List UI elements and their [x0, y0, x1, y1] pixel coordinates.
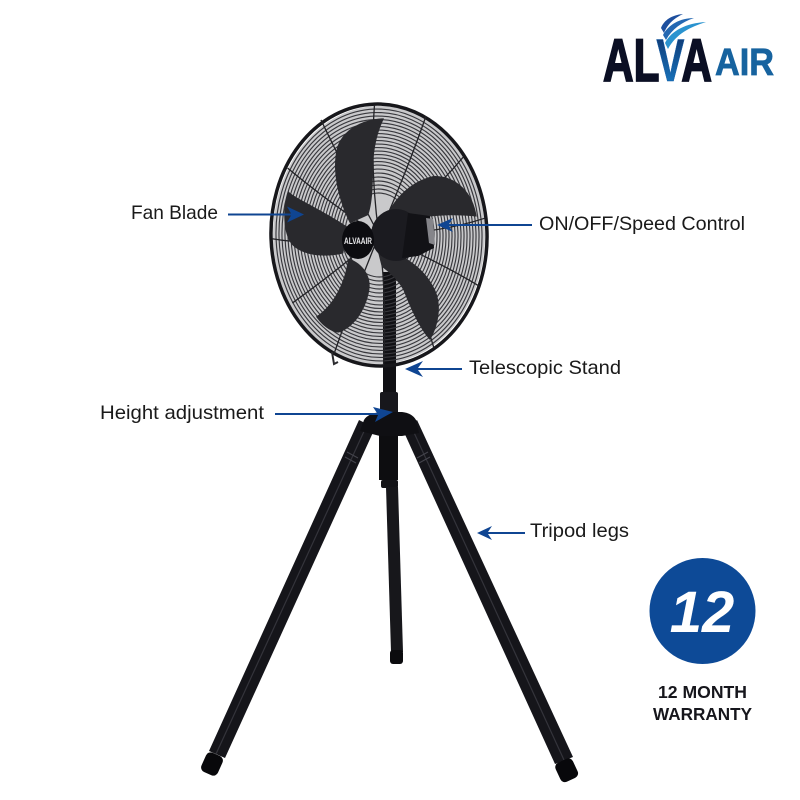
label: ON/OFF/Speed Control: ON/OFF/Speed Control [539, 213, 745, 235]
right leg [403, 420, 580, 784]
fan head [266, 100, 492, 370]
arrow: Height adjustment [275, 407, 393, 422]
blade right [383, 176, 477, 227]
motor housing [371, 209, 435, 261]
arrow: Telescopic Stand [405, 361, 462, 377]
telescopic pole [383, 272, 396, 396]
warranty badge: WARRANTY [653, 704, 752, 724]
cage clip [332, 352, 338, 364]
label: Fan Blade: Fan Blade [131, 202, 218, 224]
fan cage [266, 100, 492, 370]
logo wordmark AIR: AIR [715, 42, 774, 84]
arrow: Tripod legs [477, 526, 525, 540]
logo swoosh [661, 14, 706, 49]
cage backing tone [273, 106, 485, 364]
left leg [200, 420, 375, 777]
warranty number: 12 [670, 580, 734, 645]
warranty circle [650, 558, 756, 664]
label: Tripod legs: Tripod legs [530, 520, 629, 542]
label: Height adjustment: Height adjustment [100, 402, 265, 424]
hub logo text: ALVAAIR [344, 236, 372, 246]
arrow: Fan Blade [228, 206, 304, 222]
label: Tripod legs [477, 520, 629, 542]
blade bottom left [316, 258, 370, 333]
fan blades [284, 118, 477, 340]
tripod stand [200, 272, 580, 784]
logo: Alva Air [603, 14, 774, 94]
hub badge [342, 221, 374, 259]
rear centre leg [379, 434, 403, 664]
label: Telescopic Stand: Telescopic Stand [469, 357, 621, 379]
logo wordmark ALVA: ALVA [603, 27, 712, 94]
blade left [284, 191, 347, 256]
warranty badge [650, 558, 756, 724]
label: Height adjustment [100, 402, 393, 424]
blade bottom right [377, 247, 439, 340]
blade top [335, 118, 384, 223]
label: ON/OFF/Speed Control [437, 213, 745, 235]
tripod hub [360, 412, 419, 436]
height adjustment collar [380, 392, 398, 414]
label: Telescopic Stand [405, 357, 621, 379]
label: Fan Blade [131, 202, 304, 224]
arrow: ON/OFF/Speed Control [437, 218, 532, 232]
warranty caption: 12 MONTH [658, 682, 747, 702]
